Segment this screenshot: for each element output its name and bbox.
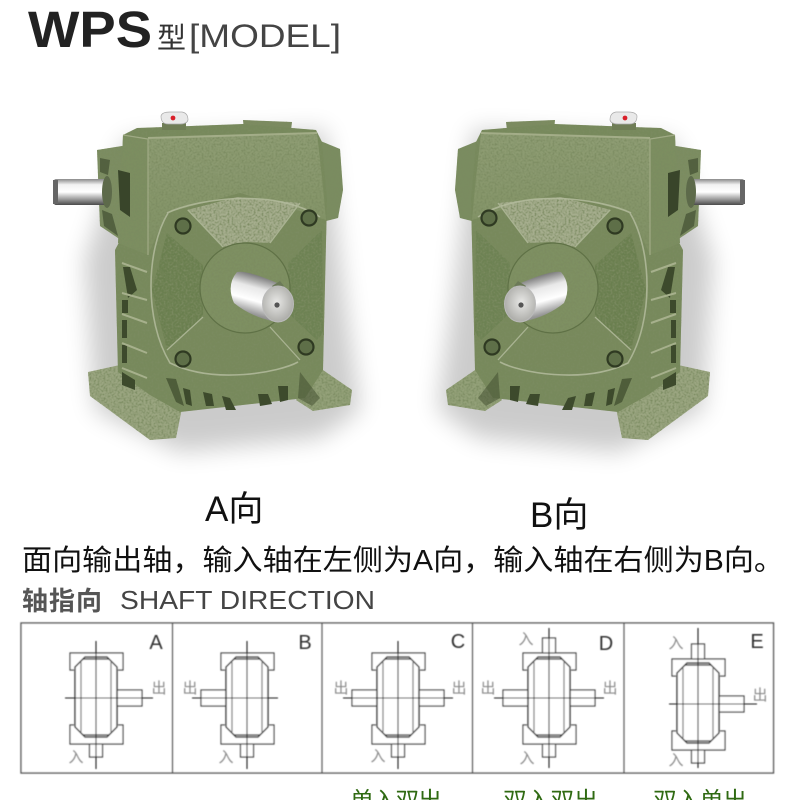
diagram D: 入 (518, 631, 534, 648)
diagram A: A (149, 632, 163, 654)
diagram E: 入 (668, 752, 684, 769)
diagram D: D (599, 633, 613, 655)
hub (200, 243, 290, 333)
diagram D: 出 (480, 680, 496, 697)
input shaft (53, 176, 112, 208)
diagram D: 入 (519, 750, 535, 767)
diagram A: 出 (151, 680, 167, 697)
shadow (85, 130, 360, 452)
ribbed side (122, 267, 320, 410)
bolts (176, 210, 316, 366)
flange openings (100, 158, 130, 236)
diagram B: 出 (182, 680, 198, 697)
heading: shaft direction (22, 585, 375, 616)
diagram B (182, 632, 312, 769)
label: B direction: B向 (530, 496, 588, 535)
heading: shaft direction: 轴指向 (22, 586, 102, 616)
heading: shaft direction: SHAFT DIRECTION (120, 585, 375, 615)
diagram C: 出 (333, 680, 349, 697)
diagram A: 入 (68, 749, 84, 766)
description sentence: 面向输出轴，输入轴在左侧为A向，输入轴在右侧为B向。 (22, 544, 784, 577)
diagram C: 入 (370, 748, 386, 765)
diagram E (668, 628, 768, 769)
title (28, 1, 341, 58)
label: A direction: A向 (205, 490, 263, 529)
diagram B: B (298, 632, 312, 654)
diagram E: E (750, 631, 764, 653)
diagram E: 入 (668, 635, 684, 652)
diagram E: 出 (752, 687, 768, 704)
diagram A (65, 632, 167, 769)
gearbox photo: A direction (53, 112, 360, 452)
gearbox photo: B direction (438, 112, 745, 452)
diagram D (480, 628, 618, 768)
title: 型 (157, 22, 186, 55)
cover plate edges (151, 198, 320, 375)
title: WPS (28, 1, 152, 58)
diagram C: C (451, 631, 465, 653)
output shaft (231, 272, 294, 322)
title: [MODEL] (189, 18, 341, 54)
diagram C: 出 (451, 680, 467, 697)
diagram B: 入 (218, 749, 234, 766)
diagram D: 出 (602, 680, 618, 697)
panel: shaft direction table (21, 623, 774, 773)
casting body (88, 120, 352, 440)
side rib highlights (122, 263, 147, 378)
vent plug (161, 112, 188, 130)
diagram C (333, 631, 467, 769)
